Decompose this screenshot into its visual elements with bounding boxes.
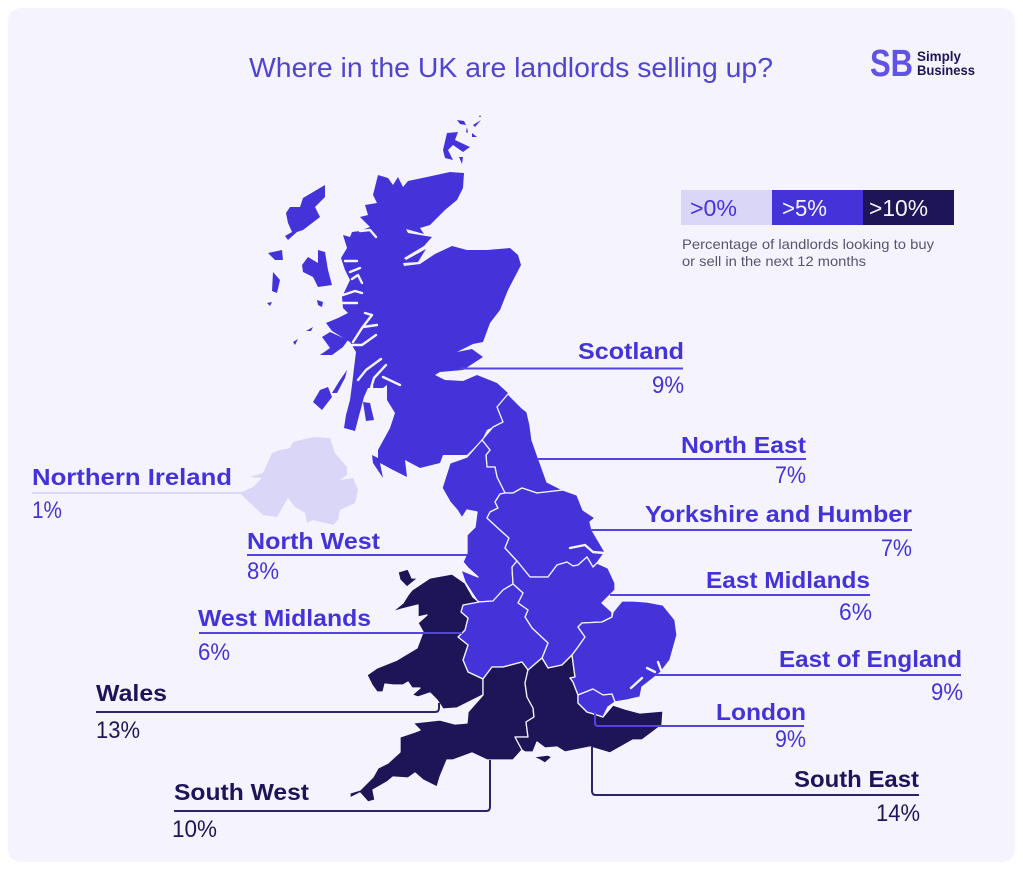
label: Yorkshire and Humber	[590, 501, 912, 562]
lochs and firths	[343, 230, 400, 395]
legend: >0%	[690, 195, 737, 221]
label: South West	[172, 760, 490, 843]
legend: >10%	[869, 195, 928, 221]
region: South East	[515, 655, 663, 763]
label: North East	[537, 432, 806, 489]
label: East of England	[655, 646, 963, 706]
label: Yorkshire and Humber: Yorkshire and Humber	[645, 501, 912, 527]
label: Wales: 13%	[96, 717, 140, 744]
label: London: 9%	[775, 726, 806, 753]
region: South West	[350, 662, 534, 802]
label: Scotland: Scotland	[578, 338, 684, 364]
region: Scotland	[267, 115, 521, 478]
label: East Midlands: East Midlands	[706, 567, 870, 593]
label: East of England: 9%	[931, 679, 963, 706]
Humber estuary	[570, 545, 604, 553]
legend	[681, 190, 954, 269]
label: South West: South West	[174, 779, 309, 805]
label: South East: 14%	[876, 800, 920, 827]
logo: Simply Business	[870, 43, 975, 85]
label: South East	[592, 747, 920, 827]
logo: Simply Business: Business	[917, 62, 975, 78]
label: Northern Ireland: Northern Ireland	[32, 464, 232, 490]
Orkney islands	[443, 115, 481, 164]
label: Scotland: 9%	[652, 372, 684, 399]
logo: Simply Business: SB	[870, 43, 913, 85]
region: West Midlands	[458, 584, 548, 679]
label: Yorkshire and Humber: 7%	[881, 535, 912, 562]
region: Northern Ireland	[240, 437, 358, 525]
label: Northern Ireland: 1%	[32, 497, 62, 524]
label: London	[595, 699, 806, 753]
label: East Midlands	[610, 567, 872, 626]
legend: Percentage of landlords looking to buy	[682, 236, 934, 252]
label: North West: North West	[247, 528, 380, 554]
label: West Midlands: West Midlands	[198, 605, 371, 631]
label: North East: North East	[681, 432, 806, 458]
region: Yorkshire and Humber	[487, 488, 605, 577]
region: London	[578, 689, 615, 717]
region: North East	[482, 394, 563, 493]
label: Wales: Wales	[96, 680, 167, 706]
region: East of England	[570, 601, 677, 702]
region: Wales	[367, 569, 483, 709]
label: North West	[247, 528, 467, 585]
Scottish islands	[267, 185, 374, 421]
title: Where in the UK are landlords selling up?	[249, 52, 773, 83]
label: North East: 7%	[775, 462, 806, 489]
region: East Midlands	[512, 557, 615, 668]
label: Northern Ireland	[32, 464, 245, 524]
estuaries	[631, 662, 661, 688]
label: South West: 10%	[172, 816, 217, 843]
region: North West	[442, 440, 517, 602]
label: London: London	[716, 699, 806, 725]
label: East Midlands: 6%	[839, 599, 872, 626]
label: Scotland	[460, 338, 684, 399]
logo: Simply Business: Simply	[917, 48, 961, 64]
label: Wales	[96, 680, 439, 744]
UK map	[240, 115, 677, 802]
legend: >5%	[782, 195, 827, 221]
label: West Midlands	[198, 605, 462, 666]
label: West Midlands: 6%	[198, 639, 230, 666]
label: South East: South East	[794, 766, 919, 792]
legend: or sell in the next 12 months	[682, 253, 866, 269]
label: East of England: East of England	[779, 646, 962, 672]
label: North West: 8%	[247, 558, 279, 585]
